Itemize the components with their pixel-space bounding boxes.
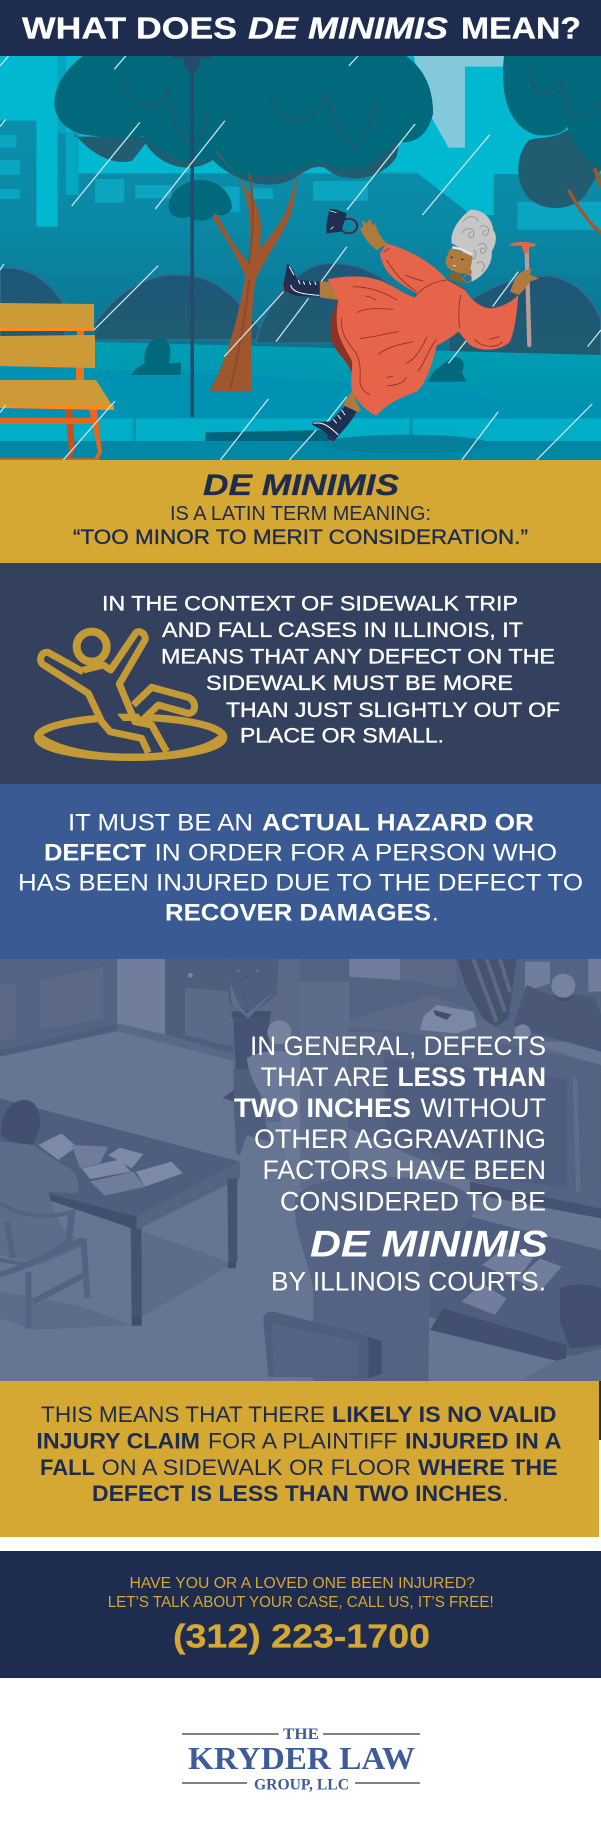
hazard text: HAS BEEN INJURED DUE TO THE DEFECT TO — [18, 870, 583, 897]
hair, face — [446, 210, 496, 283]
courtroom text: THAT ARE — [261, 1062, 389, 1092]
papers on desk — [38, 1133, 183, 1196]
bench — [0, 303, 114, 460]
courtroom text — [234, 1031, 548, 1297]
term explanation: IS A LATIN TERM MEANING: — [170, 503, 431, 525]
claim text: . — [502, 1481, 509, 1506]
flag — [457, 959, 517, 1031]
hazard text: IT MUST BE AN — [68, 810, 253, 837]
boots — [283, 263, 357, 441]
clerk table and papers — [428, 1217, 601, 1363]
title banner — [0, 0, 601, 56]
hazard text: DEFECT — [44, 840, 146, 867]
panel: no valid claim — [0, 1381, 601, 1537]
claim text: FOR A PLAINTIFF — [208, 1428, 398, 1453]
title text — [22, 10, 581, 45]
courtroom text: CONSIDERED TO BE — [280, 1187, 546, 1217]
falling woman — [283, 210, 539, 441]
logo: The Kryder Law Group, LLC: THE — [283, 1726, 319, 1743]
lamp post — [172, 56, 211, 417]
context text: MEANS THAT ANY DEFECT ON THE — [161, 645, 555, 669]
judge bench — [484, 1020, 596, 1064]
central figure — [295, 1177, 475, 1385]
hazard text: IN ORDER FOR A PERSON WHO — [154, 840, 557, 867]
title text: WHAT DOES — [22, 10, 237, 45]
courtroom text: TWO INCHES — [234, 1093, 411, 1123]
courtroom text: DE MINIMIS — [310, 1224, 548, 1265]
hazard text: . — [432, 900, 439, 927]
claim text: INJURY CLAIM — [36, 1428, 200, 1453]
context text: AND FALL CASES IN ILLINOIS, IT — [162, 618, 523, 642]
logo: The Kryder Law Group, LLC: GROUP, LLC — [254, 1776, 349, 1793]
claim text: FALL — [40, 1455, 95, 1480]
logo: The Kryder Law Group, LLC: KRYDER LAW — [188, 1740, 415, 1776]
term heading: DE MINIMIS — [203, 469, 399, 502]
term quote: “TOO MINOR TO MERIT CONSIDERATION.” — [73, 526, 528, 549]
courtroom text: BY ILLINOIS COURTS. — [271, 1267, 546, 1297]
claim text — [36, 1402, 562, 1506]
illustration: elderly woman slipping in the rain in a park — [0, 56, 601, 460]
park background — [0, 56, 601, 460]
cane — [509, 242, 536, 345]
courtroom text: WITHOUT — [420, 1093, 546, 1123]
phone number: (312) 223-1700 — [173, 1617, 430, 1654]
call to action text: LET’S TALK ABOUT YOUR CASE, CALL US, IT’S FREE! — [108, 1594, 494, 1611]
claim text: WHERE THE — [418, 1455, 558, 1480]
icon: person falling into hole — [38, 632, 224, 757]
call to action panel — [0, 1551, 601, 1678]
judge — [513, 974, 601, 1052]
hazard text: ACTUAL HAZARD OR — [262, 810, 534, 837]
context text: PLACE OR SMALL. — [240, 724, 444, 748]
courtroom right half — [263, 959, 601, 1385]
skin: hands and legs — [320, 218, 539, 413]
call to action text — [108, 1575, 494, 1611]
courtroom text: LESS THAN — [398, 1062, 546, 1092]
seated person at desk — [0, 1142, 87, 1265]
red dress — [327, 243, 518, 416]
panel: sidewalk context — [0, 563, 601, 784]
definition panel — [0, 460, 601, 563]
courtroom left half — [0, 959, 300, 1330]
courtroom text: IN GENERAL, DEFECTS — [250, 1031, 546, 1061]
logo: The Kryder Law Group, LLC — [182, 1726, 420, 1793]
claim text: ON A SIDEWALK OR FLOOR — [102, 1455, 411, 1480]
hazard text: RECOVER DAMAGES — [165, 900, 431, 927]
context text: IN THE CONTEXT OF SIDEWALK TRIP — [102, 592, 518, 616]
chair back — [264, 1312, 314, 1378]
panel: courtroom scene — [0, 959, 601, 1385]
claim text: DEFECT IS LESS THAN TWO INCHES — [92, 1481, 502, 1506]
courtroom text: OTHER AGGRAVATING — [254, 1124, 546, 1154]
claim text: INJURED IN A — [405, 1428, 562, 1453]
hazard text — [18, 810, 583, 927]
context text: THAN JUST SLIGHTLY OUT OF — [226, 698, 560, 722]
courtroom text: FACTORS HAVE BEEN — [262, 1155, 546, 1185]
person at right — [560, 1285, 601, 1348]
title text: MEAN? — [461, 10, 581, 45]
context text — [102, 592, 560, 748]
title text: DE MINIMIS — [248, 10, 448, 45]
claim text: THIS MEANS THAT THERE — [41, 1402, 325, 1427]
trees — [54, 56, 601, 392]
panel: actual hazard — [0, 784, 601, 959]
claim text: LIKELY IS NO VALID — [332, 1402, 556, 1427]
call to action text: HAVE YOU OR A LOVED ONE BEEN INJURED? — [130, 1575, 475, 1592]
rain streaks — [0, 56, 601, 460]
context text: SIDEWALK MUST BE MORE — [206, 671, 513, 695]
falling coffee cup — [326, 209, 357, 233]
